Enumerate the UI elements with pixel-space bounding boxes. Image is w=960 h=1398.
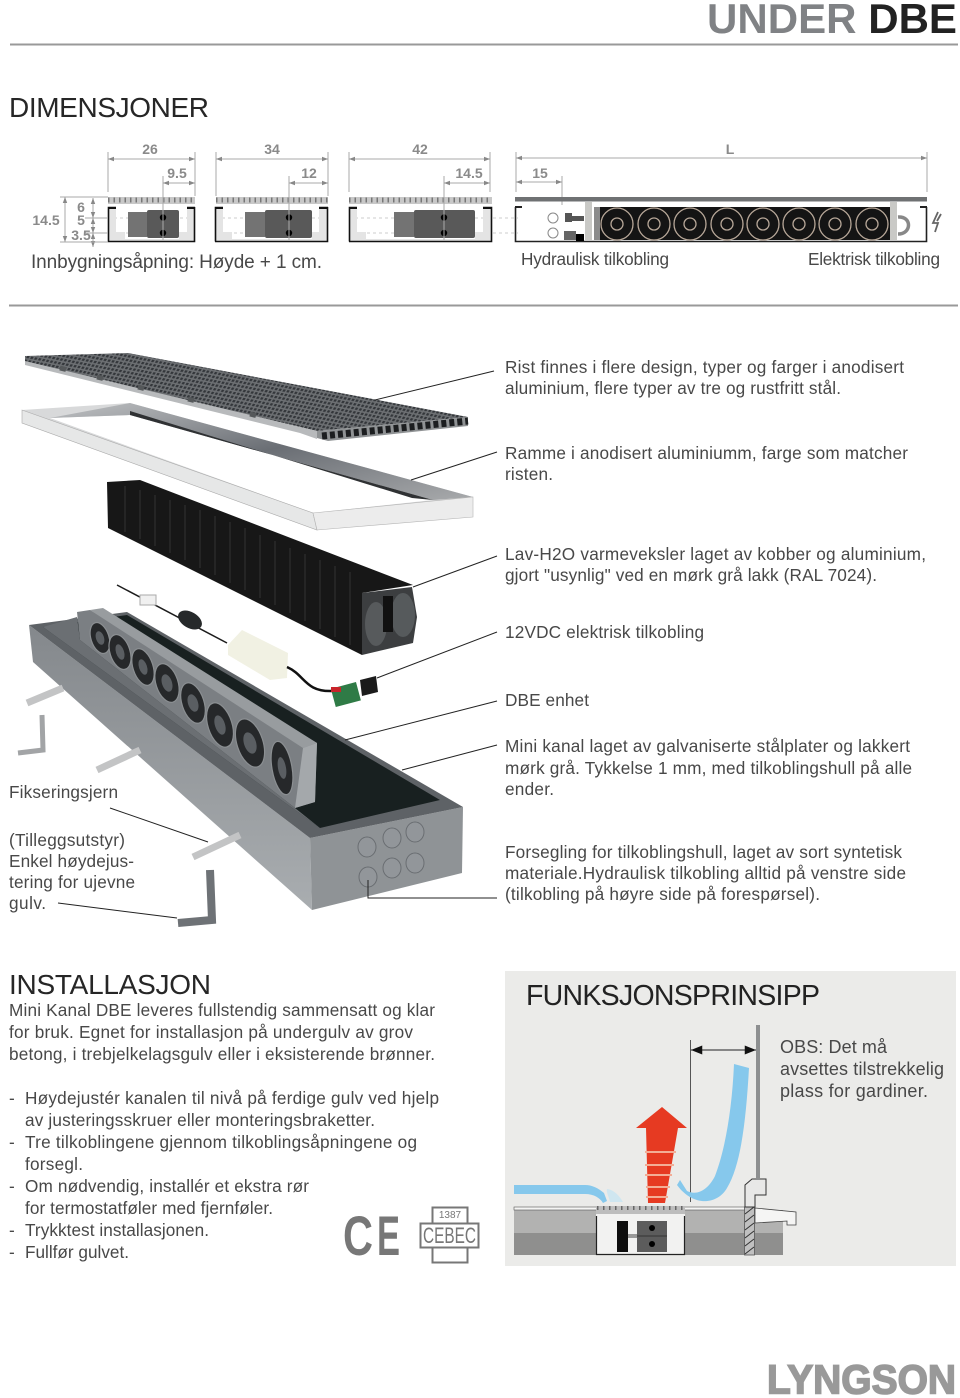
dimension lines and numbers: 6 — [77, 199, 85, 215]
text: heat exchanger — [505, 544, 926, 585]
text: heat exchanger: Lav-H2O varmeveksler laget av kobber og aluminium, — [505, 544, 926, 564]
installation steps list: - — [9, 1176, 15, 1196]
icon: CEBEC mark: CEBEC — [423, 1223, 476, 1248]
installation intro text: for bruk. Egnet for installasjon på undergulv av grov — [9, 1022, 413, 1042]
dimension lines and numbers: 5 — [77, 212, 85, 228]
icon: CEBEC mark: 1387 — [439, 1210, 462, 1221]
installation steps list: - — [9, 1242, 15, 1262]
text: sealing: Forsegling for tilkoblingshull, laget av sort syntetisk — [505, 842, 902, 862]
installation intro text — [9, 1000, 435, 1064]
red warm air arrow — [636, 1107, 687, 1203]
cross-section dimension drawing 26 — [108, 197, 195, 242]
dimension lines and numbers: 14.5 — [455, 165, 483, 181]
dimension lines and numbers: 14.5 — [32, 212, 60, 228]
dimension lines and numbers: 3.5 — [71, 227, 91, 243]
icon: CE mark: E — [377, 1204, 400, 1267]
window and curtain lines with dimension arrow — [690, 1025, 760, 1202]
fans — [86, 620, 297, 796]
text: frame: risten. — [505, 464, 553, 484]
frame illustration — [22, 403, 473, 530]
note text — [780, 1037, 944, 1101]
cross-section dimension drawing 42 — [349, 197, 518, 242]
installation steps list: Tre tilkoblingene gjennom tilkoblingsåpningene og — [25, 1132, 417, 1152]
text: electric connection: 12VDC elektrisk tilkobling — [505, 622, 704, 642]
installation steps list: - — [9, 1088, 15, 1108]
leader lines — [58, 371, 497, 918]
text: heat exchanger: gjort "usynlig" ved en mørk grå lakk (RAL 7024). — [505, 565, 877, 585]
dimension lines and numbers: 26 — [142, 141, 158, 157]
note text: avsettes tilstrekkelig — [780, 1059, 944, 1079]
text: grate: aluminium, flere typer av tre og rustfritt stål. — [505, 378, 841, 398]
dimension lines and numbers: 9.5 — [167, 165, 187, 181]
icon: CEBEC mark — [420, 1208, 478, 1262]
installation intro text: betong, i trebjelkelagsgulv eller i eksisterende brønner. — [9, 1044, 435, 1064]
dimension lines and numbers: 12 — [301, 165, 317, 181]
dimension lines and numbers: 42 — [412, 141, 428, 157]
installation steps list: for termostatføler med fjernføler. — [25, 1198, 273, 1218]
installation steps list: - — [9, 1132, 15, 1152]
dimension lines and numbers: L — [726, 141, 735, 157]
floor section — [514, 1179, 796, 1255]
note text: plass for gardiner. — [780, 1081, 928, 1101]
dimension lines and numbers: 34 — [264, 141, 280, 157]
dimension captions — [31, 249, 940, 273]
installation steps list: Trykktest installasjonen. — [25, 1220, 209, 1240]
installation steps list: - — [9, 1220, 15, 1240]
text: mini channel — [505, 736, 912, 799]
text: DBE unit: DBE enhet — [505, 690, 589, 710]
text: sealing: materiale.Hydraulisk tilkobling alltid på venstre side — [505, 863, 906, 883]
text: frame: Ramme i anodisert aluminiumm, farge som matcher — [505, 443, 908, 463]
installation steps list: av justeringsskruer eller monteringsbraketter. — [25, 1110, 375, 1130]
text: mini channel: Mini kanal laget av galvaniserte stålplater og lakkert — [505, 736, 910, 756]
dimension captions: Hydraulisk tilkobling — [521, 249, 669, 269]
heading: dimensjoner: DIMENSJONER — [9, 92, 209, 123]
dimension captions: Innbygningsåpning: Høyde + 1 cm. — [31, 252, 322, 273]
fan hubs — [94, 630, 288, 780]
text: height adjustment — [9, 830, 135, 913]
dimension lines and numbers: 15 — [532, 165, 548, 181]
blue cold air arrow from room — [514, 1185, 623, 1203]
text: grate — [505, 357, 904, 398]
electric connection parts — [117, 585, 378, 707]
channel unit with fans — [29, 608, 463, 910]
installation steps list: Om nødvendig, installér et ekstra rør — [25, 1176, 309, 1196]
heading: installasjon: INSTALLASJON — [9, 969, 211, 1000]
sealing holes — [358, 822, 424, 887]
text: mini channel: ender. — [505, 779, 554, 799]
installation steps list: Fullfør gulvet. — [25, 1242, 129, 1262]
dimension captions: Elektrisk tilkobling — [808, 249, 940, 269]
text: height adjustment: tering for ujevne — [9, 872, 135, 892]
installation steps list: forsegl. — [25, 1154, 83, 1174]
panel: funksjonsprinsipp — [505, 971, 956, 1266]
installation steps list — [9, 1088, 439, 1262]
text: height adjustment: Enkel høydejus- — [9, 851, 134, 871]
dimension lines and numbers — [32, 141, 927, 247]
grate illustration — [25, 353, 468, 441]
long section with fans — [515, 197, 941, 242]
text: frame — [505, 443, 908, 484]
note text: OBS: Det må — [780, 1037, 888, 1057]
icon: CE mark: C — [343, 1204, 373, 1267]
cross-section dimension drawing 34 — [215, 197, 328, 242]
installation steps list: Høydejustér kanalen til nivå på ferdige gulv ved hjelp — [25, 1088, 439, 1108]
blue cold air curve — [677, 1064, 749, 1201]
text: sealing: (tilkobling på høyre side på forespørsel). — [505, 884, 820, 904]
heat exchanger illustration — [107, 480, 417, 655]
text: fixing iron: Fikseringsjern — [9, 782, 118, 802]
text: mini channel: mørk grå. Tykkelse 1 mm, med tilkoblingshull på alle — [505, 758, 912, 778]
text: height adjustment: (Tilleggsutstyr) — [9, 830, 125, 850]
text: grate: Rist finnes i flere design, typer og farger i anodisert — [505, 357, 904, 377]
text: height adjustment: gulv. — [9, 893, 46, 913]
panel heading: FUNKSJONSPRINSIPP — [526, 980, 820, 1012]
fixing brackets — [18, 688, 240, 923]
installation intro text: Mini Kanal DBE leveres fullstendig sammensatt og klar — [9, 1000, 435, 1020]
text: sealing — [505, 842, 906, 904]
